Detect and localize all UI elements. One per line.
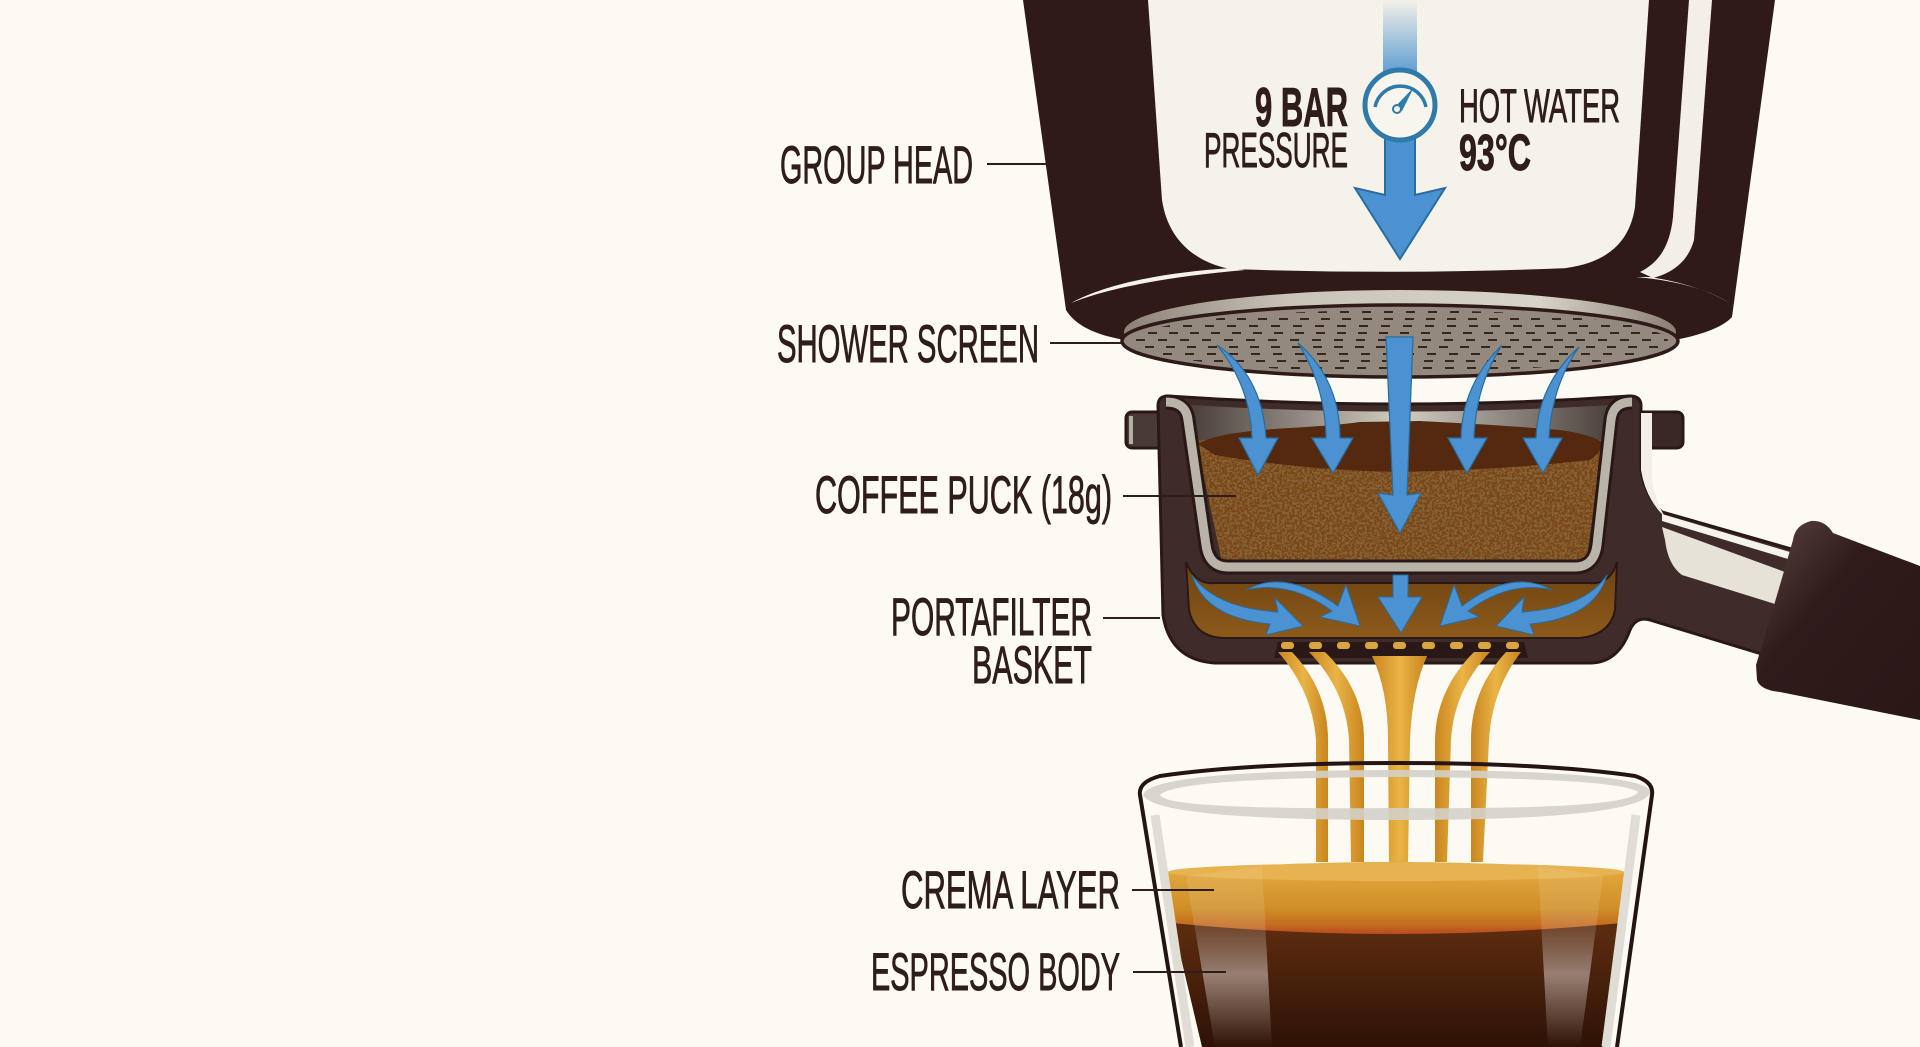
gauge hub: [1393, 105, 1401, 113]
lower centre arrow: [1378, 575, 1422, 633]
white right stripe: [1640, 0, 1712, 278]
label: portafilter basket: [891, 588, 1160, 695]
glass rim ring: [1143, 770, 1651, 820]
label: pressure: PRESSURE: [1204, 124, 1348, 178]
espresso body: [1172, 920, 1622, 1047]
group head housing: [1023, 0, 1775, 340]
water flow arrows, lower: [1192, 575, 1607, 635]
flange highlights: [1071, 268, 1730, 303]
left ear highlight: [1129, 416, 1133, 444]
grip: [1756, 521, 1920, 720]
glass outline: [1140, 763, 1652, 1047]
group head cream interior: [1148, 0, 1649, 276]
metal basket: [1166, 402, 1632, 567]
group head assembly: [1023, 0, 1775, 340]
arrow 2: [1298, 343, 1353, 473]
pressure gauge icon: [1365, 70, 1435, 140]
lower inner right arrow: [1440, 582, 1552, 626]
label: shower screen: SHOWER SCREEN: [777, 315, 1039, 374]
crema top surface: [1168, 863, 1624, 881]
lower outer left arrow: [1192, 575, 1303, 635]
blue down arrow: [1355, 138, 1445, 259]
crema layer: [1167, 862, 1625, 934]
liquid chamber: [1186, 562, 1617, 638]
label: group head: GROUP HEAD: [780, 136, 973, 195]
arm white stripe: [1662, 514, 1790, 559]
right glass reflection: [1538, 866, 1603, 1047]
arrow 5: [1523, 347, 1579, 473]
pressure arrow: [1355, 0, 1445, 259]
label: coffee puck: COFFEE PUCK (18g): [815, 466, 1112, 525]
arrow 4: [1448, 345, 1502, 473]
portafilter: [1126, 396, 1920, 720]
gauge needle: [1395, 87, 1414, 111]
water flow arrows, upper: [1217, 337, 1579, 533]
label: hot water: HOT WATER: [1459, 79, 1620, 132]
handle arm and basket body: [1158, 396, 1795, 663]
lower outer right arrow: [1496, 575, 1607, 635]
coffee puck top surface: [1198, 421, 1604, 472]
label: portafilter basket: PORTAFILTER: [891, 588, 1092, 647]
label: crema layer: CREMA LAYER: [901, 861, 1120, 920]
label: 9 bar: 9 BAR: [1255, 76, 1348, 138]
coffee puck body: [1196, 440, 1604, 562]
left ear: [1126, 412, 1166, 448]
left glass reflection: [1186, 866, 1272, 1047]
inner glass walls: [1155, 815, 1636, 1047]
espresso streams: [1278, 652, 1521, 862]
water stem: [1383, 0, 1417, 75]
screen perforations: [1120, 312, 1680, 368]
right ear: [1636, 412, 1683, 448]
gauge arc: [1375, 86, 1426, 107]
central arrow: [1378, 337, 1421, 533]
flange: [1071, 268, 1730, 335]
outlet band: [1274, 642, 1528, 658]
lower inner left arrow: [1246, 582, 1360, 626]
arm silver strip upright: [1641, 413, 1665, 517]
basket interior wall: [1190, 405, 1612, 450]
screen silver rim: [1124, 290, 1676, 374]
arm silver panel: [1662, 527, 1785, 604]
espresso cup: [1140, 652, 1652, 1047]
label: portafilter basket: BASKET: [972, 636, 1092, 695]
outlet holes: [1281, 642, 1519, 649]
screen plate: [1122, 305, 1678, 377]
shower screen: [1120, 290, 1680, 377]
gauge dial: [1365, 70, 1435, 140]
label: 93°C: 93°C: [1459, 124, 1531, 181]
arrow 1: [1217, 345, 1278, 475]
label: espresso body: ESPRESSO BODY: [871, 943, 1120, 1002]
